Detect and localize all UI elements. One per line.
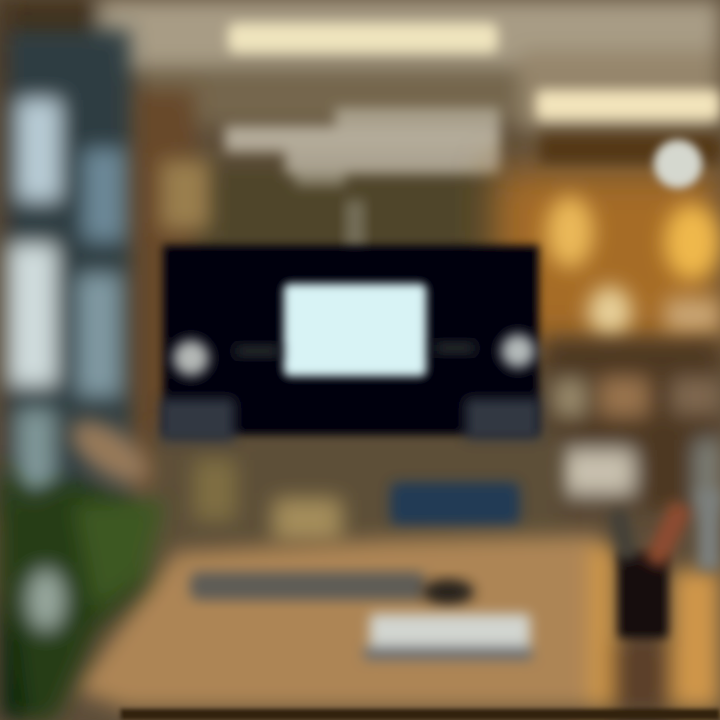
desk surface <box>75 535 720 708</box>
display centre screen <box>284 284 426 376</box>
wood highlight beside window <box>160 160 210 230</box>
pen holder <box>618 552 668 638</box>
display frame <box>163 245 539 435</box>
plant <box>0 408 165 720</box>
wall lights <box>546 196 720 338</box>
upper wall behind heading <box>150 165 500 255</box>
display left connector <box>235 345 280 357</box>
desk front edge <box>120 708 720 720</box>
wall display <box>160 245 540 442</box>
amber wall <box>495 170 720 345</box>
round wall clock <box>654 140 702 188</box>
window <box>0 0 130 520</box>
ceiling light panel: right <box>536 90 720 120</box>
mouse <box>422 579 474 605</box>
keyboard <box>190 572 425 600</box>
blue sofa <box>390 482 520 526</box>
display right connector <box>435 342 475 354</box>
display left node <box>173 340 209 376</box>
ceiling <box>0 0 720 130</box>
dark beam above amber wall <box>540 135 720 163</box>
pens <box>608 490 720 570</box>
lower wall and credenza <box>150 430 560 550</box>
display right node <box>501 334 535 368</box>
open book <box>364 614 532 660</box>
wooden window frame <box>125 90 195 490</box>
bookshelf <box>545 340 720 510</box>
blurred heading text <box>225 108 500 186</box>
ceiling light panel: centre <box>228 23 498 53</box>
display lower side panels <box>160 398 540 442</box>
connector above display <box>345 200 365 255</box>
